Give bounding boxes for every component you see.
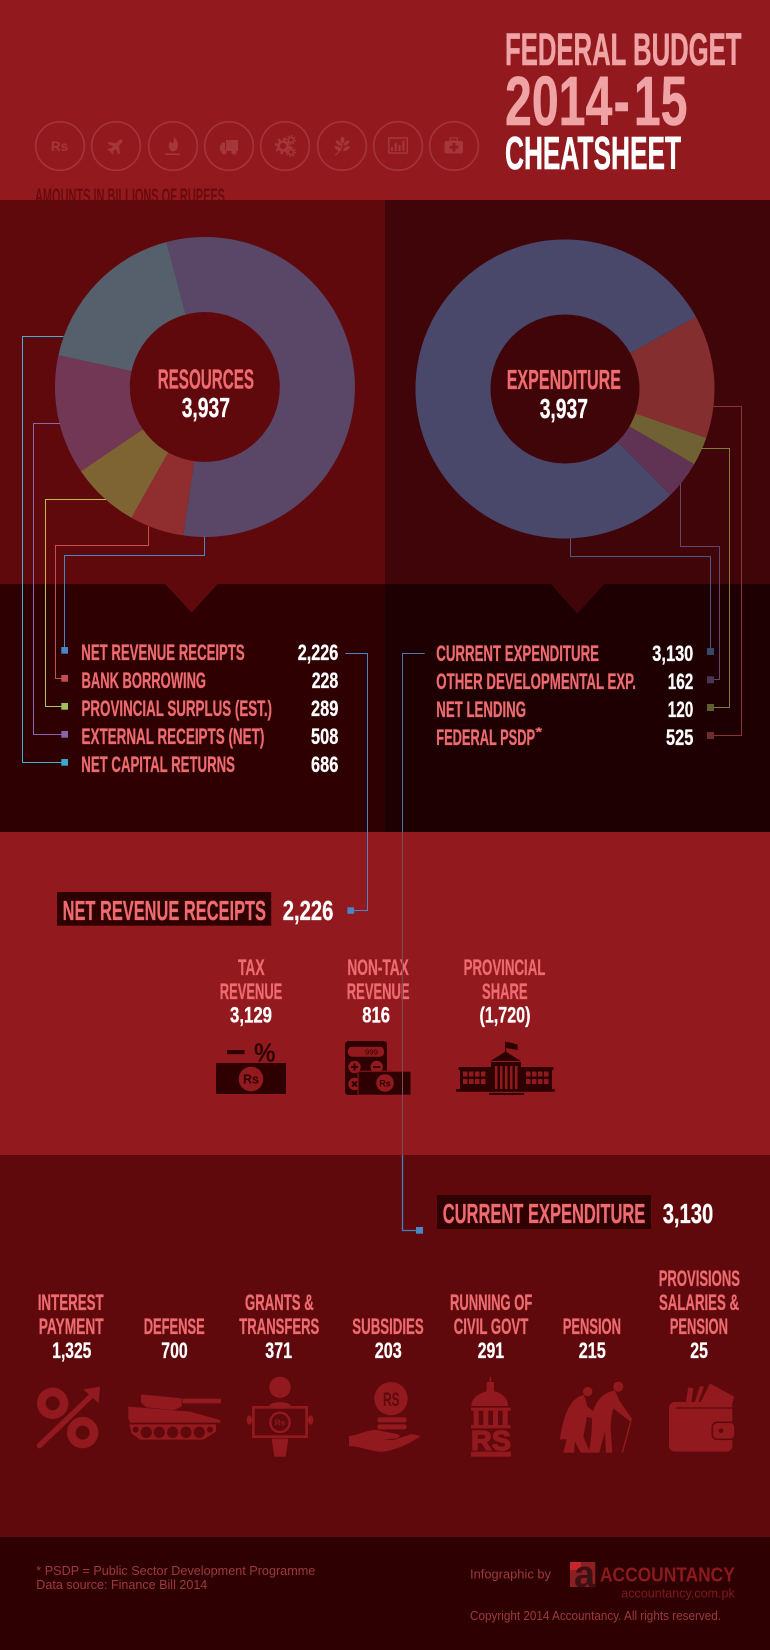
legend list: expenditure: 162 [668, 669, 693, 694]
donut label: resources total: 3,937 [182, 392, 230, 423]
column: interest payment: PAYMENT [39, 1314, 104, 1339]
icon: percent with arrow [39, 1387, 100, 1446]
icon: tax deduction [216, 1038, 286, 1094]
column: grants and transfers: GRANTS & [245, 1290, 314, 1315]
column: pension: PENSION [563, 1314, 621, 1339]
column: running of civil government [450, 1290, 532, 1457]
column: tax revenue: REVENUE [220, 979, 282, 1004]
logo: accountancy: accountancy.com.pk [621, 1586, 735, 1601]
column: pension [560, 1314, 632, 1453]
connectors: expenditure slices to legend [570, 406, 742, 736]
icon: rupee: Rs [51, 138, 68, 154]
column: grants and transfers: 371 [265, 1338, 292, 1363]
column: running of civil government: CIVIL GOVT [454, 1314, 528, 1339]
column: tax revenue: 3,129 [230, 1003, 272, 1028]
heading: current expenditure: 3,130 [663, 1198, 713, 1229]
column: grants and transfers [239, 1290, 319, 1457]
connector: current expenditure to detail [402, 654, 425, 1234]
column: defense: 700 [161, 1338, 188, 1363]
icon: tax deduction: % [254, 1038, 276, 1068]
icon: plant [334, 137, 351, 155]
pointer arrow: resources [165, 584, 218, 612]
pointer arrow: expenditure [551, 584, 604, 614]
column: provincial share: PROVINCIAL [464, 955, 546, 980]
column: interest payment [38, 1290, 104, 1446]
icon: capitol dome with RS [471, 1377, 511, 1457]
column: non-tax revenue: NON-TAX [347, 955, 409, 980]
icon: elderly couple [560, 1382, 632, 1453]
legend list: expenditure: NET LENDING [436, 697, 526, 722]
column: subsidies: 203 [375, 1338, 402, 1363]
column: pension: 215 [579, 1338, 606, 1363]
logo: accountancy [570, 1554, 735, 1601]
column: tax revenue: TAX [238, 955, 265, 980]
donut label: expenditure total: EXPENDITURE [507, 364, 621, 395]
panel: net revenue receipts detail [0, 832, 770, 1155]
icon: gears [276, 136, 295, 156]
column: defense [128, 1314, 221, 1440]
column: subsidies [349, 1314, 424, 1452]
icon: government building [456, 1042, 555, 1095]
icon: person holding banknote [247, 1377, 313, 1457]
column: provisions salaries and pension: PENSION [670, 1314, 728, 1339]
legend list: resources [81, 640, 338, 777]
legend list: expenditure: 120 [668, 697, 693, 722]
credit line: Infographic by [470, 1567, 552, 1581]
donut label: resources total [158, 363, 254, 423]
title: 2014-15 [505, 62, 688, 140]
legend list: expenditure: CURRENT EXPENDITURE [436, 641, 599, 666]
legend list: expenditure: 3,130 [652, 641, 693, 666]
icon: plane [104, 134, 128, 158]
connector: net revenue receipts to detail [345, 654, 368, 914]
icon: flame [165, 137, 180, 155]
heading: net revenue receipts: NET REVENUE RECEIPTS [63, 895, 266, 926]
donut chart: resources [55, 237, 355, 537]
column: interest payment: 1,325 [52, 1338, 91, 1363]
icon: tank [128, 1394, 221, 1440]
legend list: resources: 508 [311, 724, 338, 749]
legend list: expenditure: * [536, 725, 542, 739]
column: interest payment: INTEREST [38, 1290, 104, 1315]
legend list: resources: 289 [311, 696, 338, 721]
legend list: expenditure: 525 [666, 725, 693, 750]
icon: tax deduction: Rs [243, 1072, 259, 1086]
icon: calculator and banknote [345, 1041, 411, 1095]
legend list: expenditure: FEDERAL PSDP [436, 725, 535, 750]
icon: person holding banknote: Rs [275, 1418, 285, 1428]
legend markers: resources [61, 647, 68, 766]
icon: bar chart [389, 138, 407, 153]
legend list: resources: 228 [312, 668, 338, 693]
column: running of civil government: RUNNING OF [450, 1290, 532, 1315]
title [505, 24, 742, 179]
panel: resources [0, 200, 385, 584]
logo: accountancy: a [574, 1554, 596, 1596]
connectors: resources slices to legend [22, 336, 204, 762]
column: non-tax revenue [345, 955, 411, 1095]
icon: medical kit [444, 138, 463, 154]
column: non-tax revenue: REVENUE [347, 979, 410, 1004]
icon: truck [220, 140, 238, 155]
column: tax revenue [216, 955, 286, 1094]
logo: accountancy: ACCOUNTANCY [600, 1565, 735, 1587]
donut label: expenditure total: 3,937 [540, 393, 588, 424]
column: defense: DEFENSE [144, 1314, 205, 1339]
donut chart: expenditure [415, 239, 715, 538]
icon: calculator and banknote: Rs [379, 1078, 391, 1090]
panel: expenditure legend [385, 584, 770, 832]
icon row: budget sectors [36, 122, 478, 170]
column: non-tax revenue: 816 [362, 1003, 390, 1028]
icon: capitol dome with RS: RS [471, 1425, 511, 1456]
icon: hand with coins: RS [383, 1390, 400, 1411]
footnote and data source: * PSDP = Public Sector Development Programme [36, 1564, 315, 1578]
donut label: expenditure total [507, 364, 621, 424]
note: amounts in billions of rupees: AMOUNTS IN BILLIONS OF RUPEES [35, 184, 225, 208]
column: provincial share: (1,720) [480, 1003, 530, 1028]
legend list: resources: NET REVENUE RECEIPTS [81, 640, 245, 665]
icon: calculator and banknote: 999 [365, 1048, 378, 1056]
panel: resources legend [0, 584, 385, 832]
legend list: resources: PROVINCIAL SURPLUS (EST.) [82, 696, 272, 721]
copyright: Copyright 2014 Accountancy. All rights reserved. [470, 1609, 721, 1623]
donut label: resources total: RESOURCES [158, 363, 254, 394]
legend list: resources: EXTERNAL RECEIPTS (NET) [82, 724, 264, 749]
panel: footer [0, 1537, 770, 1650]
footnote and data source: Data source: Finance Bill 2014 [36, 1578, 207, 1592]
legend list: resources: 2,226 [298, 640, 338, 665]
column: provisions salaries and pension [659, 1266, 740, 1452]
legend list: expenditure [436, 641, 693, 750]
legend list: resources: 686 [311, 752, 338, 777]
panel: expenditure [385, 200, 770, 584]
column: provisions salaries and pension: 25 [690, 1338, 708, 1363]
heading: net revenue receipts: 2,226 [283, 895, 333, 926]
legend list: expenditure: OTHER DEVELOPMENTAL EXP. [436, 669, 636, 694]
column: provincial share [456, 955, 555, 1095]
column: grants and transfers: TRANSFERS [239, 1314, 319, 1339]
footnote and data source [36, 1564, 315, 1592]
column: subsidies: SUBSIDIES [352, 1314, 424, 1339]
panel: current expenditure detail [0, 1155, 770, 1537]
legend list: resources: BANK BORROWING [82, 668, 206, 693]
column: provincial share: SHARE [482, 979, 528, 1004]
legend markers: expenditure [707, 648, 714, 739]
column: running of civil government: 291 [478, 1338, 504, 1363]
icon: wallet with cash [669, 1383, 735, 1452]
legend list: resources: NET CAPITAL RETURNS [81, 752, 235, 777]
